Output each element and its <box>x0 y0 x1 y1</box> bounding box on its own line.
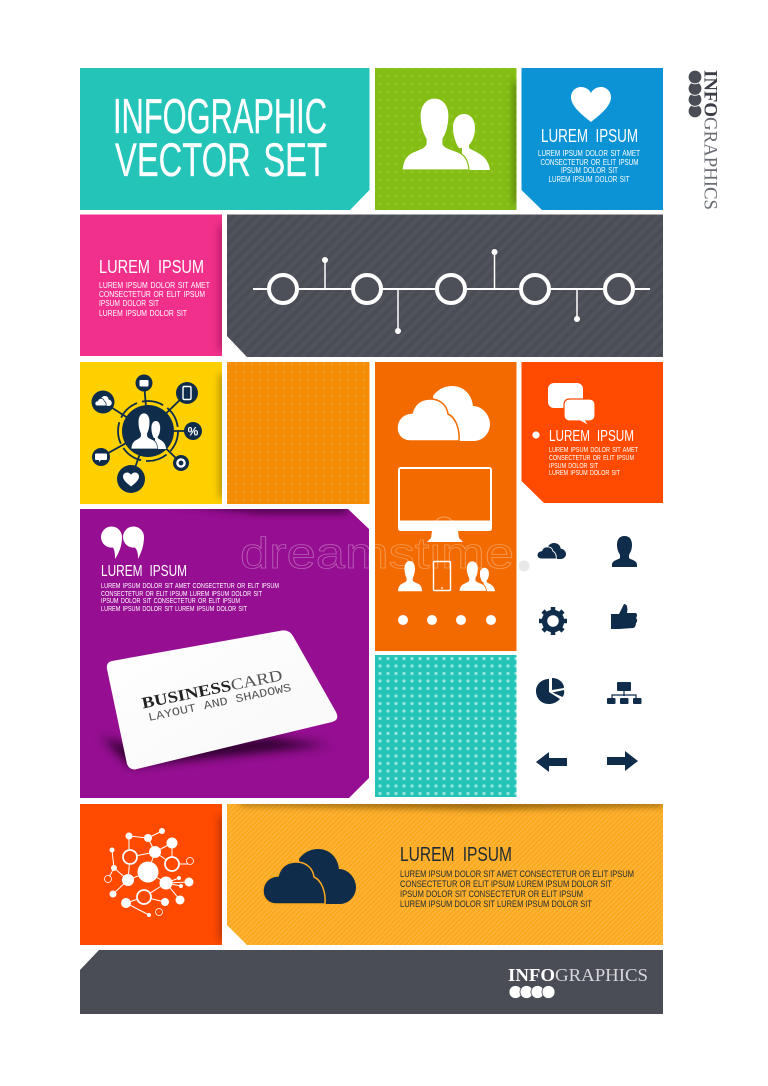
panel: purple business card <box>80 505 369 798</box>
text block: amber tile <box>400 869 634 909</box>
text block: blue tile <box>538 149 640 184</box>
panel: teal title block <box>80 68 370 210</box>
text block: pink tile: IPSUM DOLOR SIT <box>99 299 159 308</box>
text block: amber tile: IPSUM DOLOR SIT CONSECTETUR OR ELIT IPSUM <box>400 889 583 899</box>
footer logo: INFOGRAPHICS <box>508 965 648 985</box>
icon: cloud white <box>397 386 490 441</box>
text block: red tile: CONSECTETUR OR ELIT IPSUM <box>549 453 634 462</box>
side logo: rotated infographics <box>688 70 720 210</box>
icon: two people <box>402 98 490 170</box>
icon: cloud small <box>537 543 566 559</box>
icon: social hub diagram <box>92 374 202 493</box>
watermark <box>240 517 530 578</box>
text block: purple panel: IPSUM DOLOR SIT CONSECTETUR OR ELIT IPSUM <box>101 596 240 605</box>
arrow: right <box>607 751 638 771</box>
title: VECTOR SET <box>115 133 327 186</box>
heading: purple panel: LUREM IPSUM <box>101 563 187 580</box>
text block: red tile: LUREM IPSUM DOLOR SIT <box>549 468 620 477</box>
text block: pink tile: LUREM IPSUM DOLOR SIT <box>99 309 187 318</box>
icon: cloud navy <box>263 849 356 904</box>
text block: amber tile: CONSECTETUR OR ELIT IPSUM LUREM IPSUM DOLOR SIT <box>400 879 612 889</box>
icon: two people small <box>459 561 495 591</box>
heading: amber tile: LUREM IPSUM <box>400 844 512 866</box>
panel: dark timeline <box>227 214 663 357</box>
footer logo <box>508 965 648 998</box>
text block: pink tile <box>99 281 210 318</box>
text block: red tile <box>549 445 638 477</box>
panel: red speech tile <box>522 362 663 503</box>
arrow: left <box>536 752 567 772</box>
text block: red tile: LUREM IPSUM DOLOR SIT AMET <box>549 445 638 454</box>
panel: yellow hub tile <box>80 362 226 504</box>
icon: thumbs up <box>611 604 637 629</box>
panel: red network tile <box>80 804 226 945</box>
panel: tall orange devices tile <box>375 362 516 651</box>
text block: blue tile: LUREM IPSUM DOLOR SIT <box>548 175 630 184</box>
panel: pink text tile <box>80 214 226 356</box>
panel: amber striped tile <box>227 801 663 945</box>
text block: purple panel <box>101 581 279 613</box>
card shadow <box>102 737 330 766</box>
icon: person <box>398 561 422 591</box>
icon: heart <box>571 87 611 122</box>
title <box>113 90 327 186</box>
chart: timeline <box>253 249 650 334</box>
icon: tablet <box>434 562 450 590</box>
text block: amber tile: LUREM IPSUM DOLOR SIT AMET CONSECTETUR OR ELIT IPSUM <box>400 869 634 879</box>
icon: network graph <box>104 828 194 917</box>
icon grid <box>536 536 642 772</box>
icon: speech bubbles <box>548 383 595 426</box>
heading: pink tile: LUREM IPSUM <box>99 257 204 277</box>
business card <box>107 630 337 769</box>
icon: person <box>612 536 637 567</box>
icon: org chart <box>607 682 642 704</box>
icon: gear <box>539 607 567 635</box>
text block: blue tile: LUREM IPSUM DOLOR SIT AMET <box>538 149 640 158</box>
heading: blue tile: LUREM IPSUM <box>541 126 638 146</box>
card subtitle: LAYOUT AND SHADOWS <box>147 682 293 725</box>
heading: red tile: LUREM IPSUM <box>549 428 634 445</box>
panel: dark footer <box>80 950 663 1014</box>
icon: quote marks <box>101 526 144 559</box>
bullet <box>532 431 540 439</box>
card title: BUSINESS CARD <box>140 667 284 712</box>
icon: social hub diagram: % <box>188 424 199 438</box>
panel: orange dotted tile <box>227 362 370 504</box>
text block: blue tile: CONSECTETUR OR ELIT IPSUM <box>540 158 639 167</box>
dots row <box>398 615 496 625</box>
title: INFOGRAPHIC <box>113 90 327 144</box>
text block: pink tile: LUREM IPSUM DOLOR SIT AMET <box>99 281 210 290</box>
text block: purple panel: LUREM IPSUM DOLOR SIT LUREM IPSUM DOLOR SIT <box>101 604 247 613</box>
text block: purple panel: LUREM IPSUM DOLOR SIT AMET CONSECTETUR OR ELIT IPSUM <box>101 581 279 590</box>
icon: monitor <box>398 467 492 542</box>
panel: teal dotted tile <box>375 655 516 797</box>
panel: green people tile <box>375 68 520 210</box>
text block: red tile: IPSUM DOLOR SIT <box>549 461 598 470</box>
watermark: dreamstime <box>240 529 514 578</box>
panel: blue heart text tile <box>522 68 663 210</box>
text block: blue tile: IPSUM DOLOR SIT <box>561 166 618 175</box>
side logo: rotated infographics: INFO GRAPHICS <box>700 70 720 210</box>
icon: pie chart <box>536 678 564 704</box>
text block: pink tile: CONSECTETUR OR ELIT IPSUM <box>99 290 205 299</box>
text block: purple panel: CONSECTETUR OR ELIT IPSUM LUREM IPSUM DOLOR SIT <box>101 589 262 598</box>
text block: amber tile: LUREM IPSUM DOLOR SIT LUREM IPSUM DOLOR SIT <box>400 899 592 909</box>
